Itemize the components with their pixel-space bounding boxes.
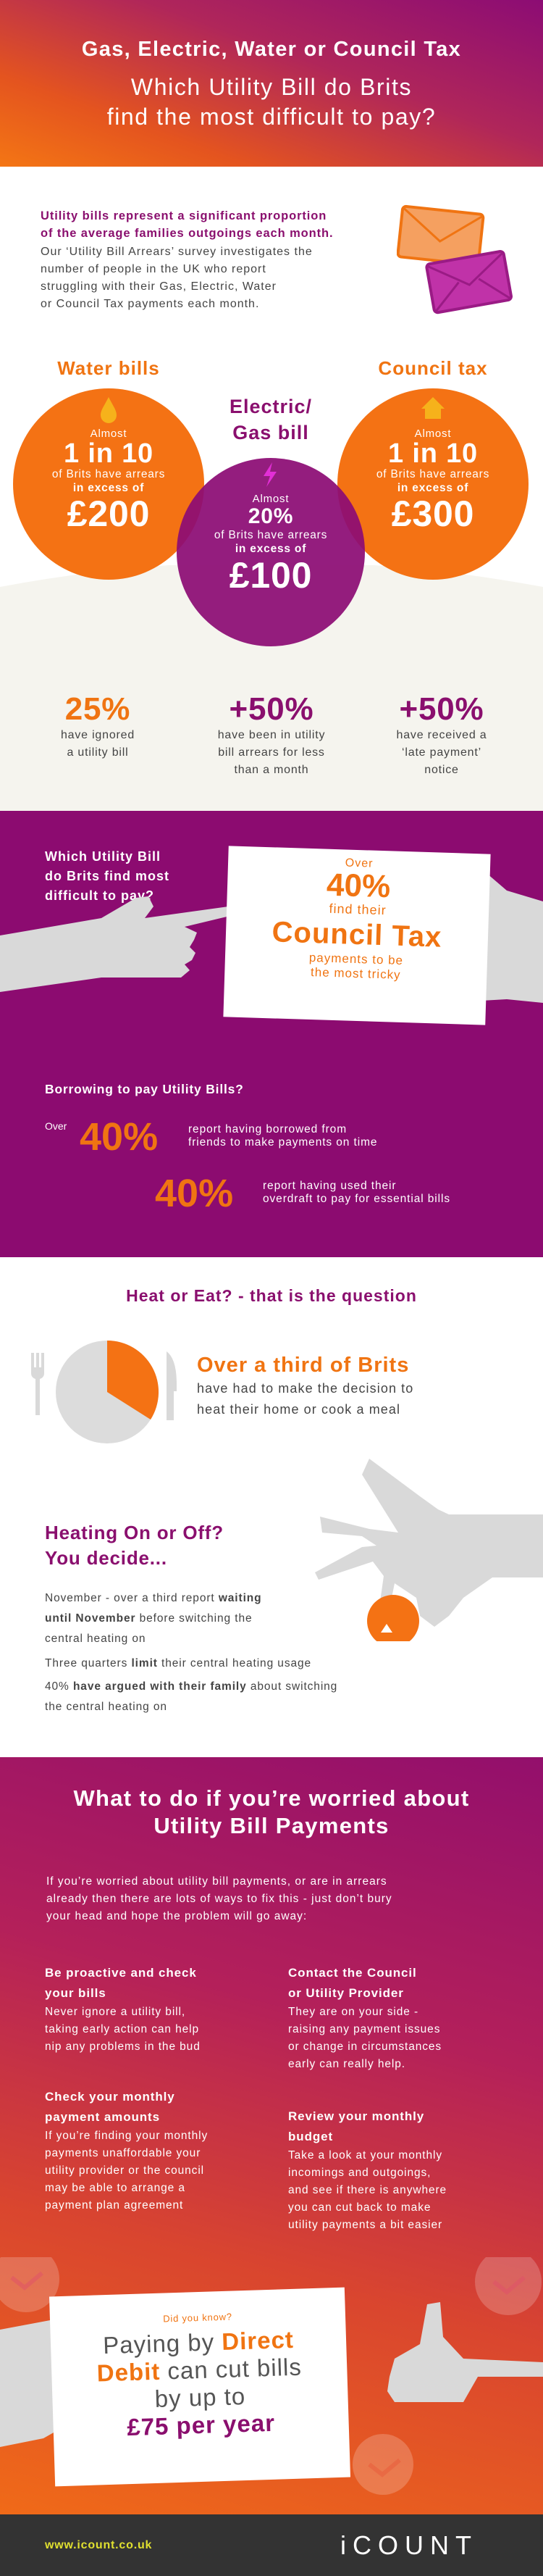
text: heating facts: until November before switching the — [45, 1612, 252, 1625]
icon: lightning — [264, 462, 277, 487]
icon: house — [421, 397, 445, 419]
tip: contact council: or change in circumstances — [288, 2041, 442, 2053]
text: over a third: Over a third of Brits — [197, 1354, 409, 1377]
tip: check monthly: payment amounts — [45, 2110, 160, 2124]
tip: review budget — [288, 2109, 447, 2231]
stat: +50% arrears: have been in utility — [218, 729, 325, 741]
tip: review budget: utility payments a bit easier — [288, 2219, 442, 2231]
heading: borrowing: Borrowing to pay Utility Bills? — [45, 1082, 244, 1096]
tip: check monthly: Check your monthly — [45, 2090, 175, 2104]
text: over a third: have had to make the decision to — [197, 1381, 413, 1396]
intro text: struggling with their Gas, Electric, Water — [41, 280, 277, 293]
stat: borrowed from friends: friends to make payments on time — [188, 1136, 377, 1149]
tip: be proactive: nip any problems in the bud — [45, 2041, 201, 2053]
stat: borrowed from friends: Over — [45, 1120, 67, 1132]
stat: +50% arrears — [218, 691, 325, 776]
tip: be proactive — [45, 1966, 201, 2053]
heading: Utility Bill Payments — [153, 1813, 390, 1838]
text: over a third — [197, 1354, 413, 1417]
tip: check monthly: utility provider or the council — [45, 2164, 204, 2177]
stat: 25%: have ignored — [61, 729, 135, 741]
heading: electric gas — [230, 396, 312, 443]
text: heating facts: Three quarters limit their central heating usage — [45, 1657, 311, 1670]
heading: heat or eat: Heat or Eat? - that is the question — [126, 1286, 417, 1305]
stat: +50% arrears: +50% — [230, 691, 313, 727]
card: council tax: Council Tax — [272, 916, 442, 954]
card: council tax: payments to be — [309, 951, 403, 967]
intro text: If you’re worried about utility bill payments, or are in arrears — [46, 1875, 387, 1888]
heading: heating on or off — [45, 1522, 224, 1569]
stat: +50% late: +50% — [400, 691, 484, 727]
tip: contact council: or Utility Provider — [288, 1986, 404, 2000]
tip: contact council: raising any payment issues — [288, 2023, 440, 2035]
intro text: of the average families outgoings each month. — [41, 227, 333, 240]
circle text: council — [376, 428, 489, 534]
circle text: council: £300 — [392, 493, 474, 534]
title: Gas, Electric, Water or Council Tax — [82, 38, 461, 61]
card: council tax: find their — [329, 901, 387, 917]
stat: borrowed from friends — [45, 1115, 377, 1159]
tip: check monthly — [45, 2090, 208, 2212]
tip: contact council — [288, 1966, 442, 2070]
stat: borrowed from friends: report having borrowed from — [188, 1123, 347, 1135]
intro text: Our ‘Utility Bill Arrears’ survey investigates the — [41, 246, 313, 258]
tip: be proactive: Be proactive and check — [45, 1966, 197, 1980]
intro text — [46, 1875, 392, 1922]
tip: review budget: Review your monthly — [288, 2109, 424, 2123]
heading: heating on or off: You decide... — [45, 1547, 167, 1569]
icons: check circles and thumbs — [0, 2257, 543, 2495]
footer — [0, 2514, 543, 2576]
card: council tax: Over — [345, 856, 374, 870]
header banner — [0, 0, 543, 167]
tip: review budget: budget — [288, 2130, 333, 2143]
intro text — [41, 209, 333, 310]
card: council tax — [223, 846, 491, 1025]
card: direct debit: Did you know? — [163, 2312, 232, 2325]
card: council tax: 40% — [326, 867, 391, 904]
heading: electric gas: Gas bill — [232, 422, 309, 443]
question heading: do Brits find most — [45, 869, 169, 883]
card: direct debit: Paying by Direct — [103, 2326, 294, 2359]
logo: icount: iCOUNT — [340, 2530, 478, 2560]
card: council tax: the most tricky — [311, 965, 401, 982]
circle text: electric: Almost — [253, 493, 289, 505]
circle text: water — [52, 428, 165, 534]
pie chart with cutlery — [31, 1341, 177, 1443]
tip: review budget: Take a look at your monthly — [288, 2149, 442, 2162]
circle text: water: in excess of — [73, 482, 144, 494]
card: direct debit — [49, 2288, 350, 2486]
tip: check monthly: may be able to arrange a — [45, 2182, 185, 2194]
tip: contact council: They are on your side - — [288, 2006, 418, 2018]
subtitle: find the most difficult to pay? — [107, 104, 436, 130]
heading: council tax: Council tax — [378, 357, 488, 379]
stat: overdraft: overdraft to pay for essential bills — [263, 1193, 450, 1205]
circle text: council: of Brits have arrears — [376, 468, 489, 480]
circle text: water: 1 in 10 — [64, 438, 153, 469]
icon: orange dial — [367, 1595, 419, 1647]
text: heating facts: the central heating on — [45, 1701, 167, 1713]
stat: +50% late — [397, 691, 487, 776]
stat: +50% late: notice — [424, 764, 459, 776]
tip: check monthly: If you’re finding your monthly — [45, 2130, 208, 2142]
subtitle — [107, 74, 436, 130]
panel: purple difficult — [0, 811, 543, 1257]
circle text: water: of Brits have arrears — [52, 468, 165, 480]
icon: knife — [167, 1351, 177, 1420]
circle text: electric: in excess of — [235, 543, 306, 555]
intro text: your head and hope the problem will go away: — [46, 1910, 307, 1922]
stat: 25%: 25% — [65, 691, 130, 727]
tip: be proactive: Never ignore a utility bill, — [45, 2006, 185, 2018]
tip: contact council: early can really help. — [288, 2058, 405, 2070]
circle text: council: Almost — [415, 428, 451, 440]
heading: electric gas: Electric/ — [230, 396, 312, 417]
circle text: electric — [214, 493, 327, 596]
intro text: or Council Tax payments each month. — [41, 298, 259, 310]
question heading: Which Utility Bill — [45, 849, 161, 864]
tip: be proactive: your bills — [45, 1986, 106, 2000]
circle text: council: 1 in 10 — [388, 438, 478, 469]
illustration: hands — [0, 876, 543, 1003]
heading: heating on or off: Heating On or Off? — [45, 1522, 224, 1543]
circle text: council: in excess of — [397, 482, 468, 494]
circle text: electric: £100 — [230, 555, 312, 596]
tip: review budget: incomings and outgoings, — [288, 2167, 431, 2179]
tip: review budget: you can cut back to make — [288, 2201, 431, 2214]
stat: +50% late: have received a — [397, 729, 487, 741]
intro text: number of people in the UK who report — [41, 263, 266, 275]
card: direct debit: by up to — [154, 2383, 246, 2412]
heading: water bills: Water bills — [57, 357, 160, 379]
circle text: water: Almost — [90, 428, 127, 440]
tip: check monthly: payment plan agreement — [45, 2199, 183, 2212]
stat: borrowed from friends: 40% — [80, 1115, 158, 1159]
text: heating facts — [45, 1592, 337, 1713]
stat: +50% arrears: than a month — [235, 764, 308, 776]
circle text: electric: 20% — [248, 504, 293, 528]
cream lower background — [0, 565, 543, 811]
card: direct debit: Debit can cut bills — [96, 2354, 302, 2386]
tip: be proactive: taking early action can help — [45, 2023, 199, 2035]
icon: fork — [31, 1353, 44, 1415]
text: over a third: heat their home or cook a meal — [197, 1402, 400, 1417]
icon: water drop — [101, 397, 117, 423]
intro text: Utility bills represent a significant proportion — [41, 209, 327, 222]
circles chart — [13, 388, 529, 646]
stat: overdraft: report having used their — [263, 1180, 396, 1192]
illustration: hand with dial — [315, 1459, 543, 1641]
stat: overdraft: 40% — [155, 1172, 233, 1215]
stat: +50% arrears: bill arrears for less — [218, 746, 325, 759]
question heading — [45, 849, 169, 903]
circle text: electric: of Brits have arrears — [214, 529, 327, 541]
tip: contact council: Contact the Council — [288, 1966, 417, 1980]
text: heating facts: 40% have argued with their family about switching — [45, 1680, 337, 1693]
intro text: already then there are lots of ways to fix this - just don’t bury — [46, 1893, 392, 1905]
text: heating facts: central heating on — [45, 1633, 146, 1645]
stat: 25% — [61, 691, 135, 759]
stat: overdraft — [155, 1172, 450, 1215]
footer url: www.icount.co.uk — [45, 2539, 152, 2551]
icon: envelopes — [397, 204, 513, 314]
card: direct debit: £75 per year — [127, 2409, 276, 2440]
tip: check monthly: payments unaffordable your — [45, 2147, 201, 2159]
tip: review budget: and see if there is anywhere — [288, 2184, 447, 2196]
stat: 25%: a utility bill — [67, 746, 129, 759]
heading — [73, 1785, 470, 1838]
heading: What to do if you’re worried about — [73, 1785, 470, 1811]
circle text: water: £200 — [67, 493, 150, 534]
text: heating facts: November - over a third report waiting — [45, 1592, 262, 1604]
subtitle: Which Utility Bill do Brits — [131, 74, 412, 100]
question heading: difficult to pay? — [45, 888, 154, 903]
stat: +50% late: ‘late payment’ — [402, 746, 481, 759]
panel: what to do — [0, 1757, 543, 2514]
